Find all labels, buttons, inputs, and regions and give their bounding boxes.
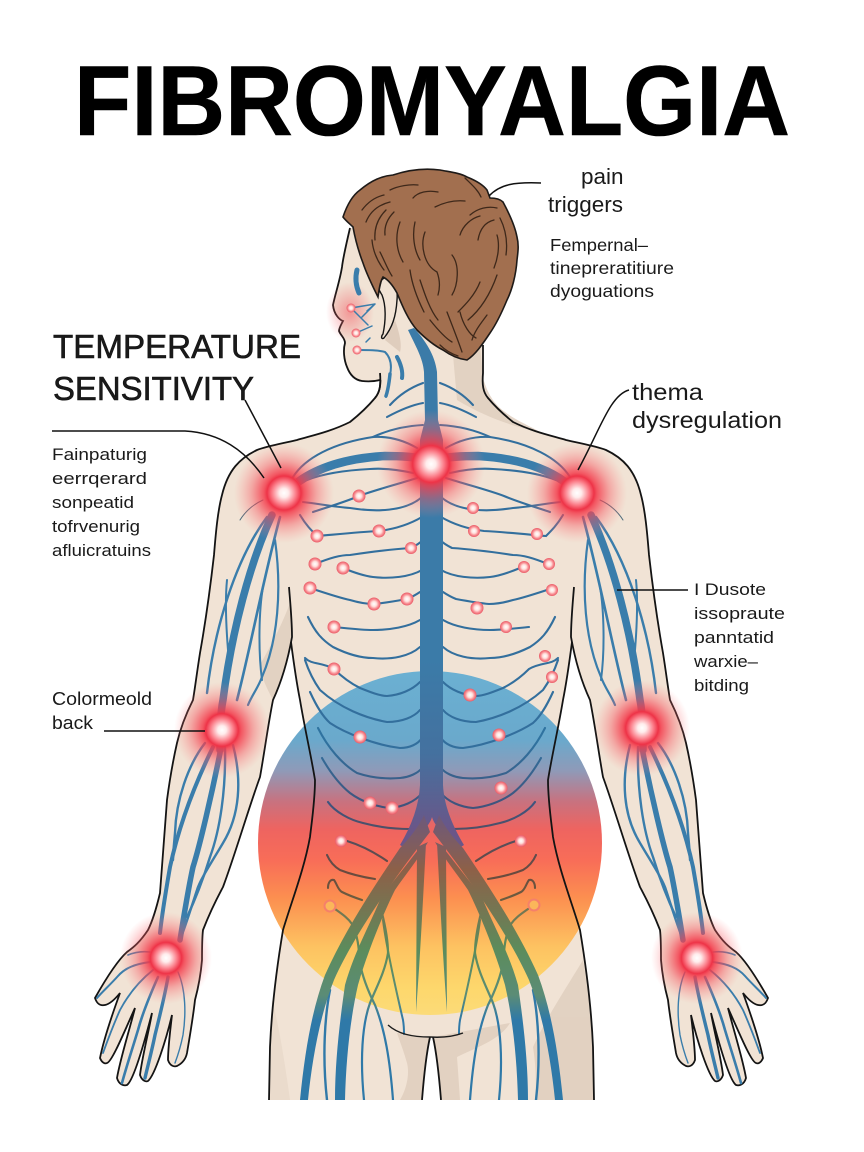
text: right description: warxie– [693,652,759,671]
jaw to neck line [375,373,380,398]
glow: right elbow [594,680,690,776]
text: left description: afluicratuins [52,541,151,560]
label: thema dysregulation: thema [632,379,703,405]
label: colormeold back: Colormeold [52,689,152,709]
text: right description: panntatid [694,628,774,647]
groin crease [388,1025,463,1037]
label: colormeold back: back [52,713,94,733]
text: left description: sonpeatid [52,493,134,512]
heading: temperature sensitivity [53,328,301,407]
label: pain triggers: triggers [548,192,623,217]
glow: left wrist [120,912,212,1004]
ear [378,277,397,339]
heat gradient circle [258,671,602,1015]
hair strands [362,178,507,356]
title: FIBROMYALGIA [74,45,790,156]
neck shadow under ear [385,320,401,352]
text: temperature block: dyoguations [550,281,654,301]
right arm nerves [583,500,766,1083]
shoulder collar nerve left [298,456,425,482]
glow: left shoulder [234,443,334,543]
label: thema dysregulation: dysregulation [632,407,782,433]
text: right description: I Dusote [694,580,766,599]
spine nerve with lower flare [400,328,464,850]
label: thema dysregulation [632,379,782,433]
glow: right wrist [651,912,743,1004]
left body outline [95,345,430,1100]
hair [343,169,518,360]
human body figure [95,169,768,1100]
face outline [333,228,380,381]
text: right description [693,580,785,695]
small tender points [304,304,558,847]
leader lines [52,183,688,731]
pain points [120,304,743,1004]
face redness [328,285,372,339]
skin fill left half [95,335,432,1100]
lower orange tender points [324,900,540,912]
label: colormeold back [52,689,152,733]
text: right description: issopraute [694,604,785,623]
left arm nerves [97,500,280,1083]
face [334,228,421,380]
right leg main nerves [433,815,563,1100]
body shading [260,345,594,1100]
heading: temperature sensitivity: SENSITIVITY [53,370,254,407]
torso nerve branches left [293,383,423,1100]
glow: right shoulder [527,443,627,543]
text: temperature block: Fempernal– [550,235,648,255]
skin fill right half [431,335,768,1100]
left leg main nerves [300,815,430,1100]
text: left description: tofrvenurig [52,517,140,536]
torso nerve branches right [440,383,570,1100]
text: left description: Fainpaturig [52,445,147,464]
shoulder collar nerve right [438,456,565,482]
text: temperature block: tinepreratitiure [550,258,674,278]
text: temperature block [550,235,674,301]
label: pain triggers: pain [581,164,624,189]
heading: temperature sensitivity: TEMPERATURE [53,328,301,365]
text: right description: bitding [694,676,749,695]
glow: spine top [377,410,485,518]
face and neck nerves [351,270,402,397]
right body outline [433,345,768,1100]
glow: left elbow [174,682,270,778]
text: left description [52,445,151,560]
label: pain triggers [548,164,624,217]
text: left description: eerrqerard [52,469,147,488]
